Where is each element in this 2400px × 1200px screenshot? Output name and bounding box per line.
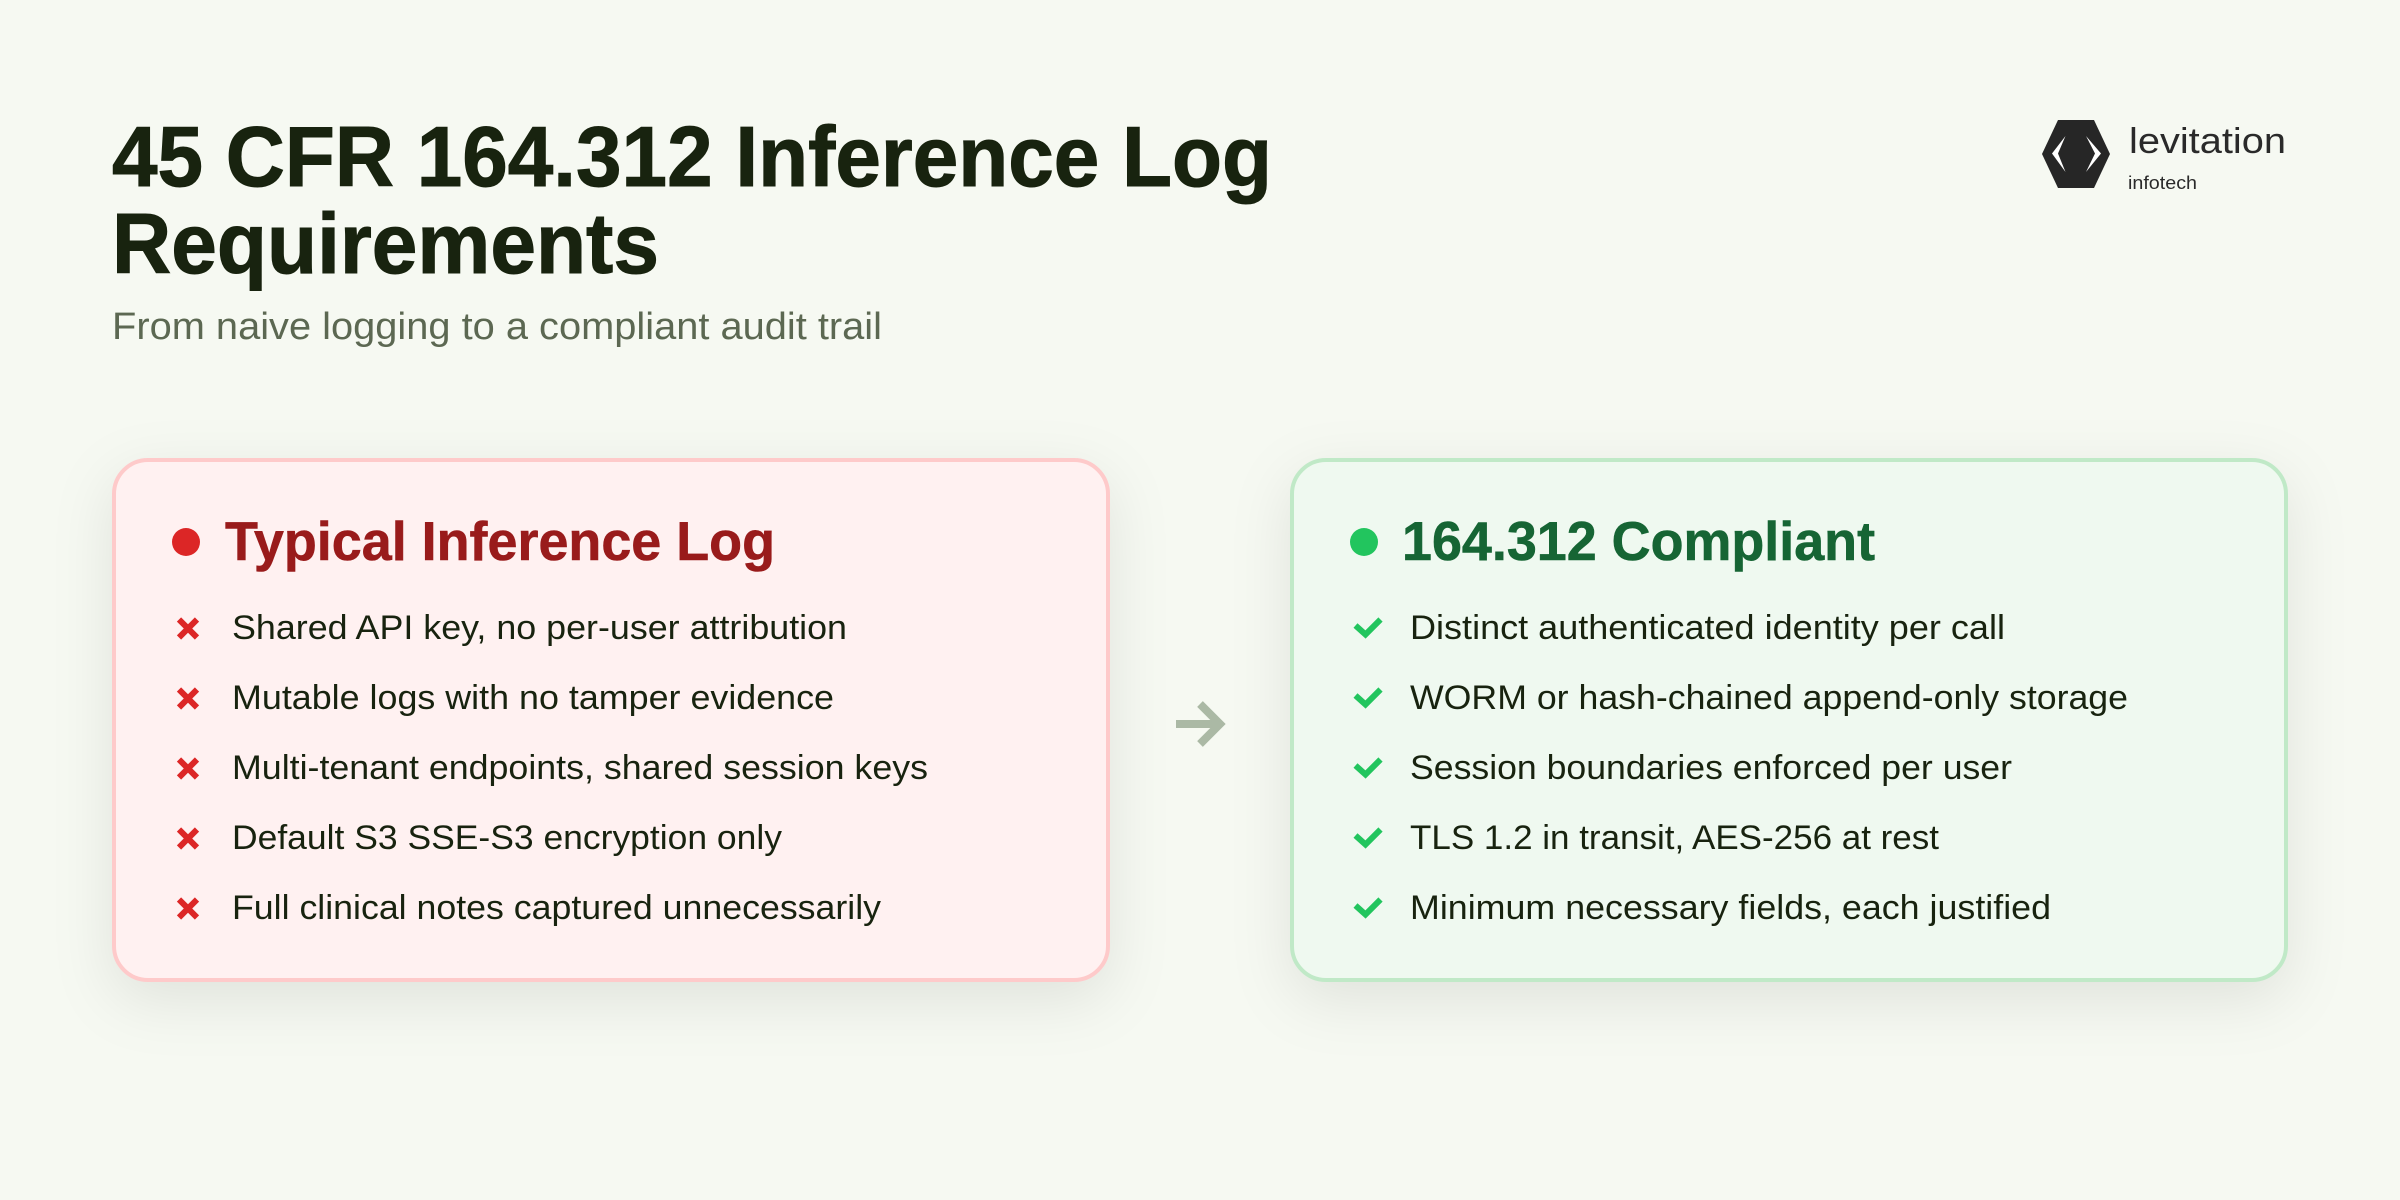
subtitle: From naive logging to a compliant audit trail	[112, 306, 882, 348]
status dot: green	[1350, 528, 1378, 556]
list of problems: Multi-tenant endpoints, shared session keys	[232, 749, 928, 787]
icon: hexagon logo mark	[2042, 120, 2110, 188]
icons: red crosses	[179, 620, 197, 918]
panel: 164.312 compliant	[1292, 460, 2286, 980]
list of requirements: Session boundaries enforced per user	[1410, 749, 2012, 787]
list of problems: Default S3 SSE-S3 encryption only	[232, 819, 782, 857]
list of requirements: TLS 1.2 in transit, AES-256 at rest	[1410, 819, 1940, 857]
list of problems: Full clinical notes captured unnecessarily	[232, 889, 881, 927]
icons: green check marks	[1356, 620, 1380, 914]
logo: levitation infotech	[2042, 120, 2286, 193]
list of requirements: Distinct authenticated identity per call	[1410, 609, 2005, 647]
list of requirements	[1410, 609, 2128, 927]
title: 45 CFR 164.312 Inference Log	[112, 110, 1272, 205]
title: Requirements	[112, 197, 659, 292]
list of problems	[232, 609, 928, 927]
list of requirements: Minimum necessary fields, each justified	[1410, 889, 2051, 927]
logo wordmark: levitation	[2129, 120, 2286, 161]
list of problems: Shared API key, no per-user attribution	[232, 609, 847, 647]
panel heading: 164.312 Compliant	[1402, 510, 1875, 572]
status dot: red	[172, 528, 200, 556]
panel: typical inference log	[114, 460, 1108, 980]
logo tagline: infotech	[2128, 173, 2197, 193]
arrow	[1176, 704, 1220, 744]
panel heading: Typical Inference Log	[225, 510, 775, 572]
title	[112, 110, 1272, 292]
list of problems: Mutable logs with no tamper evidence	[232, 679, 834, 717]
list of requirements: WORM or hash-chained append-only storage	[1410, 679, 2128, 717]
